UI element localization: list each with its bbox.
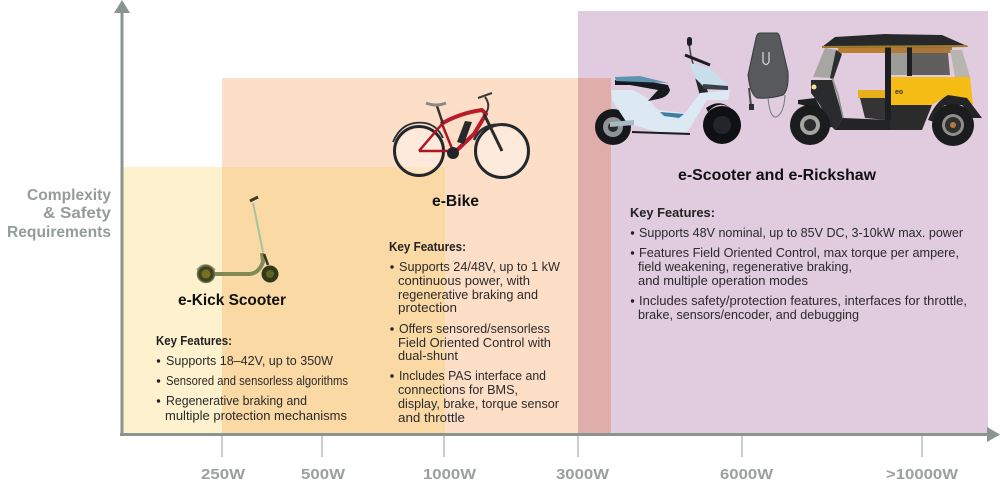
text block: e-Kick Scooter features: Sensored and sensorless algorithms — [166, 374, 348, 388]
panel: e-Scooter and e-Rickshaw power band — [578, 11, 988, 433]
text block: e-Bike features: display, brake, torque sensor — [398, 397, 559, 411]
text block: e-Bike features: dual-shunt — [398, 349, 459, 363]
text block: e-Scooter and e-Rickshaw features: and multiple operation modes — [638, 274, 808, 288]
text block: e-Kick Scooter features: Regenerative braking and — [166, 394, 307, 408]
heading: e-Kick Scooter: e-Kick Scooter — [178, 292, 286, 309]
icon: e-rickshaw: eo — [895, 89, 903, 96]
y axis label — [7, 187, 111, 241]
text block: e-Scooter and e-Rickshaw features — [630, 206, 967, 322]
text block: e-Scooter and e-Rickshaw features: Supports 48V nominal, up to 85V DC, 3-10kW max. power — [639, 226, 963, 240]
text block: e-Bike features: Includes PAS interface and — [399, 369, 546, 383]
y axis label: & Safety — [43, 205, 111, 222]
x axis labels — [201, 466, 959, 483]
x axis labels: >10000W — [886, 466, 959, 483]
y axis label: Complexity — [27, 187, 111, 204]
panel: e-Kick Scooter power band — [123, 167, 445, 433]
text block: e-Scooter and e-Rickshaw features: Features Field Oriented Control, max torque per ampere, — [639, 246, 959, 260]
heading: e-Bike: e-Bike — [432, 193, 479, 210]
x axis tick marks — [222, 436, 922, 457]
neck joining shield to body — [692, 66, 708, 96]
x axis labels: 250W — [201, 466, 246, 483]
icon: e-scooter — [595, 37, 741, 145]
x axis arrow — [120, 427, 1000, 442]
icon: e-kick scooter — [197, 197, 278, 282]
x axis labels: 1000W — [423, 466, 477, 483]
text block: e-Scooter and e-Rickshaw features: field weakening, regenerative braking, — [638, 260, 852, 274]
text block: e-Bike features — [389, 240, 560, 425]
icon: e-rickshaw — [790, 34, 982, 146]
icon: wall charger — [748, 33, 788, 117]
text block: e-Kick Scooter features — [156, 334, 348, 423]
x axis labels: 6000W — [720, 466, 774, 483]
text block: e-Bike features: Offers sensored/sensorless — [399, 322, 550, 336]
y axis label: Requirements — [7, 224, 111, 241]
text block: e-Kick Scooter features: Key Features: — [156, 334, 232, 348]
text block: e-Bike features: Supports 24/48V, up to 1 kW — [399, 260, 560, 274]
text block: e-Bike features: protection — [398, 301, 457, 315]
overlap: scooter and bike bands — [222, 167, 445, 433]
x axis labels: 3000W — [556, 466, 610, 483]
text block: e-Bike features: Field Oriented Control with — [398, 336, 551, 350]
text block: e-Bike features: Key Features: — [389, 240, 466, 254]
y axis arrow — [114, 0, 130, 435]
text block: e-Scooter and e-Rickshaw features: Includes safety/protection features, interfaces for throttle, — [639, 294, 967, 308]
x axis labels: 500W — [301, 466, 346, 483]
text block: e-Scooter and e-Rickshaw features: brake, sensors/encoder, and debugging — [638, 308, 859, 322]
panel: e-Bike power band — [222, 78, 611, 433]
text block: e-Bike features: and throttle — [398, 411, 465, 425]
text block: e-Kick Scooter features: Supports 18–42V, up to 350W — [166, 354, 333, 368]
text block: e-Bike features: regenerative braking and — [398, 288, 538, 302]
icon: e-bike — [393, 93, 528, 178]
overlap: bike and rickshaw bands — [578, 78, 611, 433]
heading: e-Scooter and e-Rickshaw: e-Scooter and e-Rickshaw — [678, 167, 877, 184]
text block: e-Bike features: continuous power, with — [398, 274, 530, 288]
text block: e-Kick Scooter features: multiple protection mechanisms — [165, 409, 347, 423]
text block: e-Bike features: connections for BMS, — [398, 383, 518, 397]
text block: e-Scooter and e-Rickshaw features: Key Features: — [630, 206, 715, 220]
